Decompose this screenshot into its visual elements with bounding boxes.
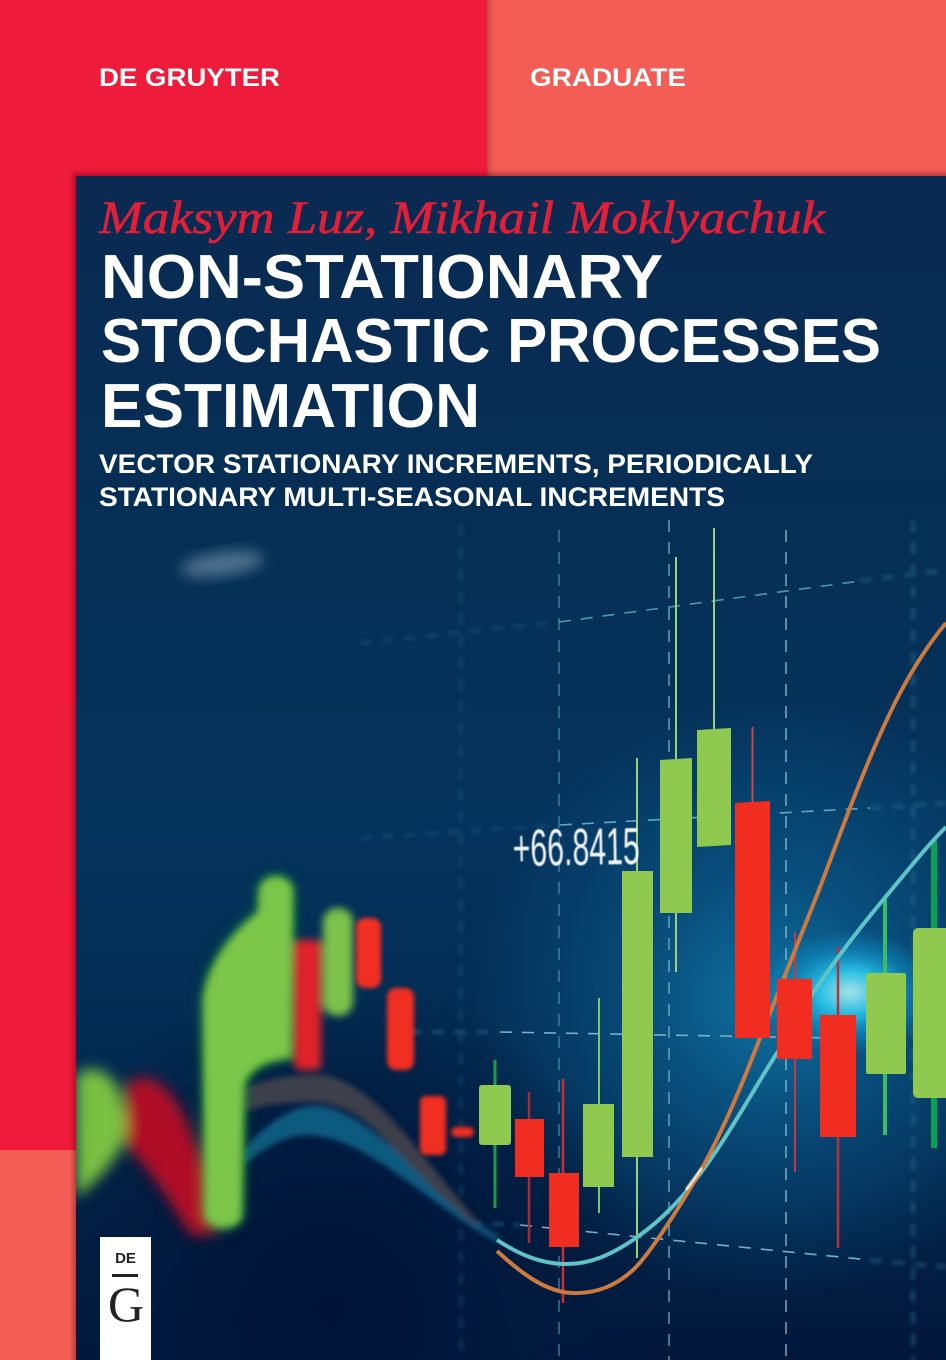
publisher logo: DE <box>115 1250 136 1267</box>
teal moving average line <box>497 827 946 1264</box>
floating value label: +66.8415 <box>512 818 640 878</box>
faded moving average curves <box>225 1075 500 1243</box>
salmon lower left block <box>0 1150 76 1360</box>
book title <box>102 254 879 428</box>
chart grid lines <box>360 520 946 1360</box>
publisher logo: G <box>108 1276 144 1332</box>
highlight at curve crossing <box>686 1168 702 1190</box>
series label: GRADUATE <box>530 64 686 92</box>
book subtitle <box>99 454 812 506</box>
book title: STOCHASTIC PROCESSES <box>101 307 881 376</box>
orange moving average line <box>497 623 946 1293</box>
book title: ESTIMATION <box>101 372 480 441</box>
salmon header block <box>487 0 946 176</box>
book title: NON-STATIONARY <box>101 243 663 312</box>
book subtitle: STATIONARY MULTI-SEASONAL INCREMENTS <box>99 482 725 512</box>
publisher logo <box>100 1237 151 1360</box>
candlestick bodies <box>479 728 946 1247</box>
red cover band <box>0 0 487 1150</box>
candlestick wicks <box>495 528 934 1303</box>
publisher name: DE GRUYTER <box>99 64 280 92</box>
blurred background candles <box>76 876 474 1235</box>
book subtitle: VECTOR STATIONARY INCREMENTS, PERIODICALLY <box>99 449 813 479</box>
book authors: Maksym Luz, Mikhail Moklyachuk <box>98 192 826 244</box>
